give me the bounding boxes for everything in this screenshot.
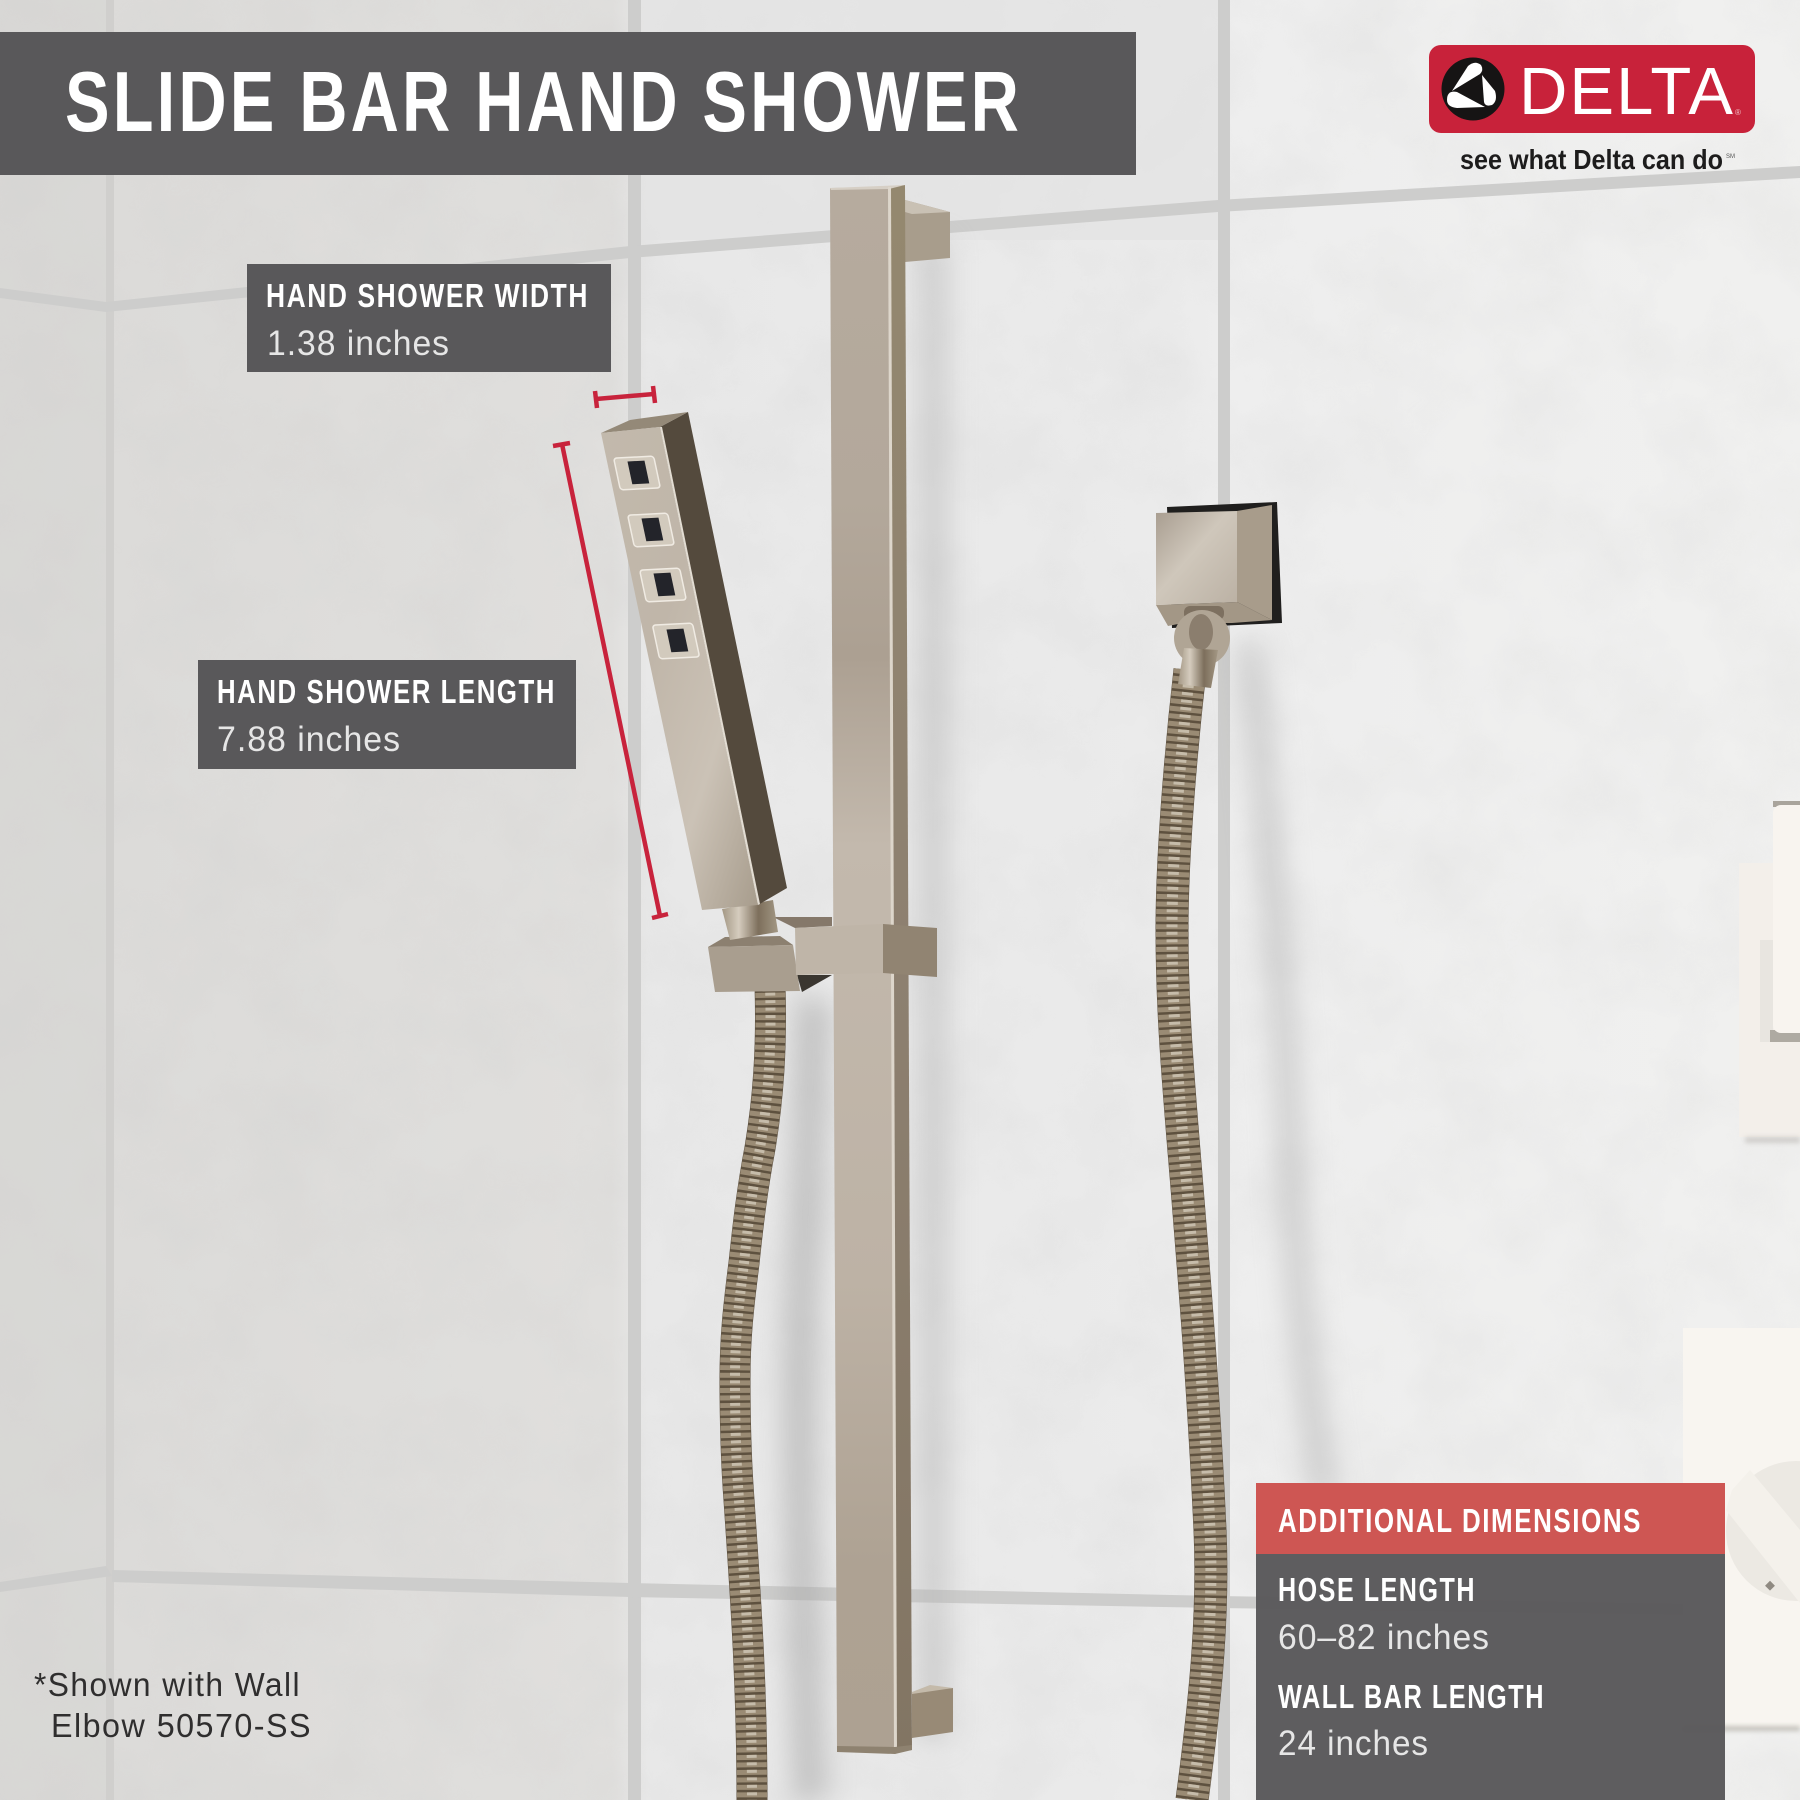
Delta logo: SM: [1726, 154, 1735, 160]
wall bar length: WALL BAR LENGTH: [1278, 1678, 1545, 1715]
hose length: [1278, 1571, 1490, 1657]
icon: delta triangle mark: [1442, 58, 1504, 120]
callout: hand shower length: [198, 660, 576, 769]
bar front face: [830, 187, 895, 1753]
wall shadows from product: [800, 240, 1325, 1800]
footnote: [34, 1666, 312, 1744]
panel header: ADDITIONAL DIMENSIONS: [1278, 1502, 1642, 1539]
swivel holder: [708, 936, 793, 947]
title: SLIDE BAR HAND SHOWER: [65, 55, 1022, 150]
bathroom fixtures at right edge: [1683, 801, 1800, 1731]
hose length: HOSE LENGTH: [1278, 1571, 1476, 1608]
panel header: [1256, 1483, 1725, 1554]
hand shower holder and clamp: [708, 900, 937, 992]
wordmark: DELTA: [1519, 54, 1733, 129]
callout: hand shower width: 1.38 inches: [267, 324, 450, 363]
panel: additional dimensions: [1256, 1483, 1725, 1800]
hose length: 60–82 inches: [1278, 1618, 1490, 1657]
callout: hand shower length: 7.88 inches: [217, 720, 401, 759]
Delta logo: [1429, 45, 1755, 175]
footnote: *Shown with Wall: [34, 1666, 301, 1703]
wall elbow: [1156, 502, 1282, 688]
bar side face: [889, 185, 912, 1752]
Delta logo: ®: [1735, 108, 1741, 117]
slogan: see what Delta can do: [1460, 144, 1723, 175]
right hose: [1172, 670, 1211, 1800]
top wall bracket: [905, 200, 950, 262]
callout: hand shower width: HAND SHOWER WIDTH: [266, 277, 589, 314]
title bar: [0, 32, 1136, 175]
wall bar length: 24 inches: [1278, 1724, 1429, 1763]
slide bar: [830, 185, 953, 1754]
arrow: length dimension line: [553, 443, 668, 918]
clamp side: [883, 924, 937, 977]
left hose: [735, 985, 771, 1800]
wall bar length: [1278, 1678, 1545, 1763]
hand shower head: [601, 412, 787, 910]
callout: hand shower length: HAND SHOWER LENGTH: [217, 673, 556, 710]
arrow: width dimension line: [595, 386, 655, 408]
neck: [722, 900, 778, 940]
clamp front: [795, 924, 883, 975]
bottom wall bracket: [912, 1685, 953, 1738]
footnote: Elbow 50570-SS: [51, 1707, 312, 1744]
spray jets: [614, 456, 700, 659]
callout: hand shower width: [247, 264, 611, 372]
